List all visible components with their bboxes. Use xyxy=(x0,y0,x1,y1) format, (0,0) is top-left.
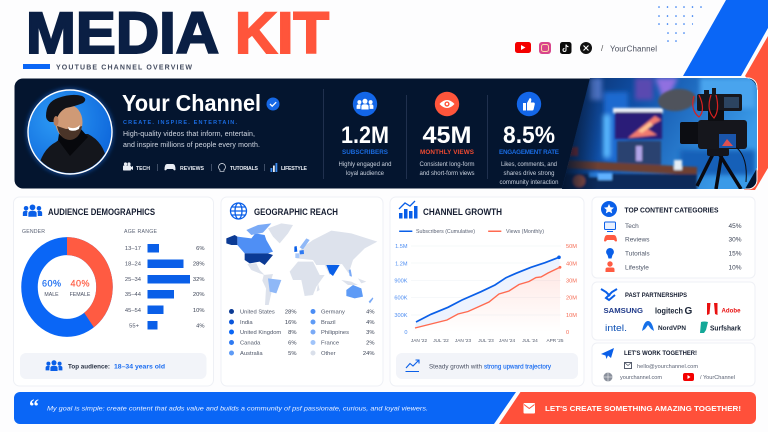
icon: audience xyxy=(23,204,42,217)
stat: engagement rate: Likes, comments, and xyxy=(501,162,557,168)
icon: growth bars xyxy=(399,201,418,218)
map legend: India xyxy=(240,320,253,326)
channel topics: TECH xyxy=(136,166,150,172)
bar chart: age range xyxy=(125,244,204,330)
icon: bars xyxy=(270,163,277,172)
category list: 15% xyxy=(728,250,742,258)
donut chart: 60% xyxy=(42,278,61,288)
callout: growth: strong upward trajectory xyxy=(484,364,552,370)
stat: monthly views: Consistent long-form xyxy=(420,162,474,168)
channel topics: LIFESTYLE xyxy=(281,166,308,172)
youtube handle xyxy=(683,373,735,381)
map legend: Canada xyxy=(240,340,261,346)
callout: growth xyxy=(396,353,578,379)
line chart: JUL '24 xyxy=(522,338,538,343)
category list xyxy=(604,222,742,272)
category list: Reviews xyxy=(625,236,650,244)
hero panel xyxy=(14,78,760,190)
youtube handle: / YourChannel xyxy=(700,375,735,381)
panel: top content categories xyxy=(592,197,755,278)
bar chart: age range: 18–24 xyxy=(125,262,142,268)
stat: monthly views: 45M xyxy=(422,122,472,149)
chart legend: Subscribers (Cumulative) xyxy=(416,229,475,235)
stat: engagement rate: shares drive strong xyxy=(504,171,554,177)
bar chart: age range: 32% xyxy=(193,277,204,283)
bar chart: age range: 35–44 xyxy=(125,292,142,298)
icon: video camera xyxy=(123,162,133,170)
stat: monthly views: MONTHLY VIEWS xyxy=(420,149,474,156)
panel: audience demographics: AGE RANGE xyxy=(124,229,158,235)
line chart: JAN '24 xyxy=(499,338,516,343)
line chart: JAN '23 xyxy=(455,338,472,343)
photo: camera in studio xyxy=(560,78,760,190)
call to action: LET'S CREATE SOMETHING AMAZING TOGETHER! xyxy=(545,404,741,413)
heading: TOP CONTENT CATEGORIES xyxy=(624,206,719,214)
callout: top audience: 18–34 years old xyxy=(114,364,165,370)
partner logos: intel. xyxy=(605,323,627,333)
title: KIT xyxy=(235,1,329,66)
stat: engagement rate xyxy=(499,92,559,186)
bar chart: age range: 45–54 xyxy=(125,308,142,314)
category list: 10% xyxy=(728,264,742,272)
map legend xyxy=(229,309,374,357)
bar chart: age range: 4% xyxy=(196,324,204,330)
stat: subscribers: loyal audience xyxy=(346,171,385,177)
category list: 45% xyxy=(728,223,742,230)
email xyxy=(624,362,698,370)
email: hello@yourchannel.com xyxy=(637,364,698,370)
channel description: and inspire millions of people every month. xyxy=(123,142,260,149)
avatar xyxy=(26,88,114,180)
donut chart: MALE xyxy=(44,292,59,298)
map legend: 3% xyxy=(366,330,374,336)
partner logos: G xyxy=(684,306,692,317)
quote banner xyxy=(14,392,516,424)
map legend: 28% xyxy=(285,310,296,316)
map legend: France xyxy=(321,340,339,346)
map legend: 4% xyxy=(366,310,374,316)
call to action xyxy=(499,392,756,424)
map legend: United Kingdom xyxy=(240,330,281,336)
map legend: Philippines xyxy=(321,330,349,336)
map legend: 24% xyxy=(363,351,374,357)
chart legend xyxy=(399,229,544,235)
stat: monthly views: and short-form views xyxy=(420,171,474,177)
bar chart: age range: 6% xyxy=(196,246,204,252)
stat: engagement rate: 8.5% xyxy=(503,122,555,149)
icon: star xyxy=(601,201,617,217)
callout: top audience xyxy=(20,353,206,379)
icon: light bulb xyxy=(219,164,225,171)
map legend: 16% xyxy=(285,320,296,326)
partner logos: Adobe xyxy=(722,308,741,314)
donut chart xyxy=(30,246,104,328)
panel: contact xyxy=(592,343,755,386)
panel: geographic reach xyxy=(221,197,383,386)
channel description xyxy=(123,131,260,149)
partner logos xyxy=(604,303,742,333)
line chart: 300K xyxy=(394,313,408,319)
icon: gamepad xyxy=(164,164,176,170)
quote banner: “ xyxy=(29,396,39,418)
map legend: 4% xyxy=(366,320,374,326)
bar chart: age range: 10% xyxy=(193,308,204,314)
map legend: Other xyxy=(321,351,336,357)
map legend: 8% xyxy=(288,330,296,336)
category list: Tutorials xyxy=(625,250,650,258)
icon: handshake xyxy=(601,289,617,300)
category list: Tech xyxy=(625,223,639,230)
panel: audience demographics: GENDER xyxy=(22,229,45,235)
panel: audience demographics xyxy=(14,197,214,386)
category list: 30% xyxy=(728,236,742,244)
map legend: Australia xyxy=(240,351,263,357)
line chart: 40M xyxy=(566,262,577,268)
channel topics: REVIEWS xyxy=(180,166,205,172)
world map xyxy=(226,223,377,305)
stat: monthly views xyxy=(420,92,474,177)
website: yourchannel.com xyxy=(620,375,662,381)
panel: past partnerships xyxy=(592,282,755,340)
bar chart: age range: 28% xyxy=(193,262,204,268)
map legend: 6% xyxy=(288,340,296,346)
line chart: 900K xyxy=(394,278,408,284)
bar chart: age range: 13–17 xyxy=(125,246,141,252)
line chart xyxy=(394,244,577,343)
bar chart: age range: 25–34 xyxy=(125,277,142,283)
social links: / xyxy=(601,44,604,53)
decorative corner stripes xyxy=(683,0,768,190)
line chart: JUL '22 xyxy=(433,338,449,343)
line chart: JUL '23 xyxy=(478,338,494,343)
partner logos: SAMSUNG xyxy=(604,306,643,315)
line chart: 1.2M xyxy=(395,262,408,268)
map legend: 5% xyxy=(288,351,296,357)
map legend: Germany xyxy=(321,310,345,316)
heading: CHANNEL GROWTH xyxy=(423,207,502,217)
line chart: 600K xyxy=(394,296,408,302)
stat: engagement rate: ENGAGEMENT RATE xyxy=(499,149,559,156)
icon: paper plane xyxy=(601,348,614,359)
category list: Lifestyle xyxy=(625,264,649,272)
quote banner: My goal is simple: create content that adds value and builds a community of psf passionate, curious, and loyal viewers. xyxy=(47,406,428,412)
channel description: High-quality videos that inform, entertain, xyxy=(123,131,255,138)
title: MEDIA xyxy=(26,1,219,66)
chart legend: Views (Monthly) xyxy=(506,229,544,235)
partner logos: Surfshark xyxy=(710,324,742,332)
channel topics: TUTORIALS xyxy=(230,166,259,172)
stat: subscribers: 1.2M xyxy=(341,122,389,149)
bar chart: age range: 20% xyxy=(193,292,204,298)
heading: PAST PARTNERSHIPS xyxy=(625,292,688,299)
panel: channel growth xyxy=(390,197,584,386)
line chart: 20M xyxy=(566,296,577,302)
map legend: 2% xyxy=(366,340,374,346)
social links xyxy=(515,42,657,54)
icon: globe xyxy=(230,203,246,219)
map legend: United States xyxy=(240,310,275,316)
heading: LET'S WORK TOGETHER! xyxy=(624,351,697,357)
stat: subscribers: SUBSCRIBERS xyxy=(342,149,388,156)
line chart: 0 xyxy=(566,330,569,336)
bar chart: age range: 55+ xyxy=(129,324,140,330)
line chart: 0 xyxy=(404,330,408,336)
dot pattern xyxy=(658,6,702,42)
donut chart: 40% xyxy=(70,278,90,288)
heading: GEOGRAPHIC REACH xyxy=(254,207,338,217)
subtitle: YOUTUBE CHANNEL OVERVIEW xyxy=(56,64,192,72)
map legend: Brazil xyxy=(321,320,336,326)
callout: top audience: Top audience: xyxy=(68,364,110,370)
callout: growth: Steady growth with xyxy=(429,364,482,370)
title xyxy=(26,1,329,66)
website xyxy=(604,372,662,382)
heading: AUDIENCE DEMOGRAPHICS xyxy=(48,207,155,217)
line chart: 1.5M xyxy=(395,244,408,250)
stat: subscribers xyxy=(338,92,392,177)
channel name: Your Channel xyxy=(122,90,261,116)
line chart: JAN '22 xyxy=(411,338,428,343)
donut chart: FEMALE xyxy=(70,292,91,298)
line chart: 50M xyxy=(566,244,577,250)
channel topics xyxy=(123,162,308,172)
line chart: 10M xyxy=(566,313,577,319)
stat: subscribers: Highly engaged and xyxy=(338,162,392,168)
camera xyxy=(657,87,747,189)
partner logos: NordVPN xyxy=(658,325,686,332)
tagline: CREATE. INSPIRE. ENTERTAIN. xyxy=(123,120,237,126)
stat: engagement rate: community interaction xyxy=(500,180,558,186)
line chart: 30M xyxy=(566,278,577,284)
social links: YourChannel xyxy=(610,44,657,54)
line chart: APR '25 xyxy=(546,338,564,343)
partner logos: logitech xyxy=(655,306,683,316)
